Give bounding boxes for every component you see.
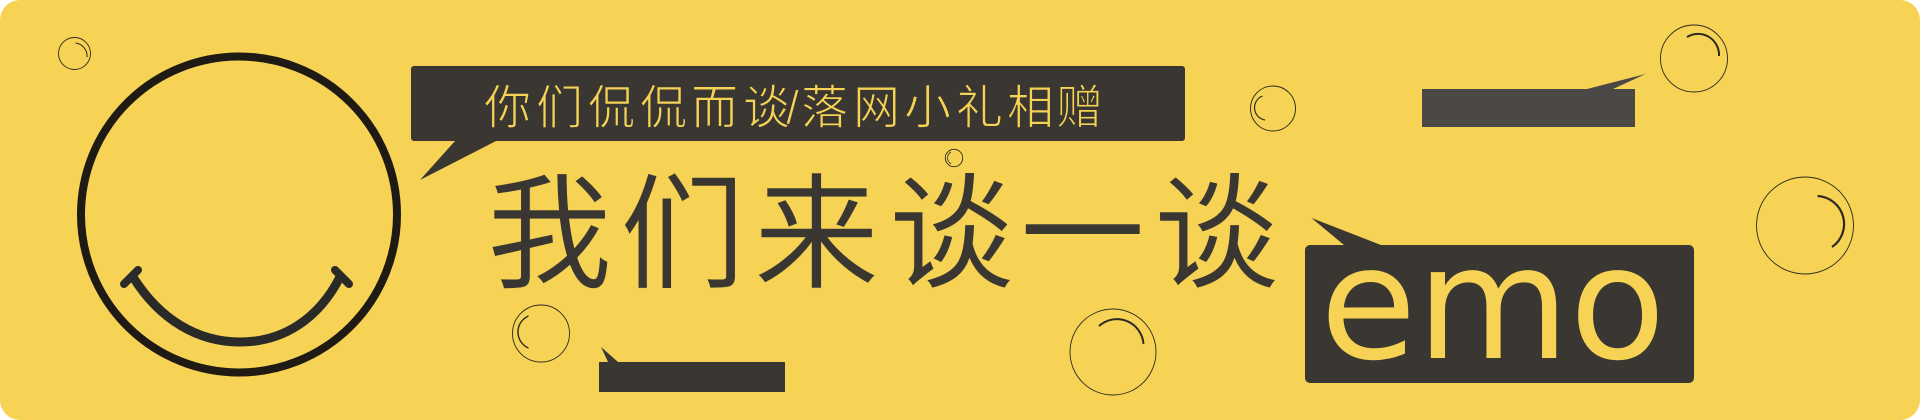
subtitle text: 你们侃侃而谈/落网小礼相赠 — [484, 81, 1103, 134]
speech bubble: small bottom — [599, 347, 785, 392]
speech bubble: top right — [1422, 74, 1646, 127]
bubble: bottom centre — [1070, 309, 1156, 395]
bubble: top right — [1660, 25, 1728, 92]
speech bubble: emo — [1305, 213, 1694, 396]
bubble: top left — [58, 38, 90, 70]
icon: smiley face — [81, 56, 397, 372]
speech bubble: subtitle — [411, 66, 1185, 180]
bubble: bottom left — [512, 305, 570, 362]
smile left cap — [124, 270, 138, 284]
emo text: emo — [1320, 213, 1666, 396]
smile right cap — [335, 270, 349, 284]
smile — [133, 277, 340, 342]
bubble: far right — [1756, 177, 1854, 274]
bubble body with tail — [1305, 218, 1694, 383]
bubble: centre right — [1250, 86, 1296, 131]
bubble: tiny centre — [945, 149, 963, 167]
title: 我们来谈一谈 — [487, 166, 1279, 305]
face outline — [81, 56, 397, 372]
bubble body with tail — [411, 66, 1185, 180]
